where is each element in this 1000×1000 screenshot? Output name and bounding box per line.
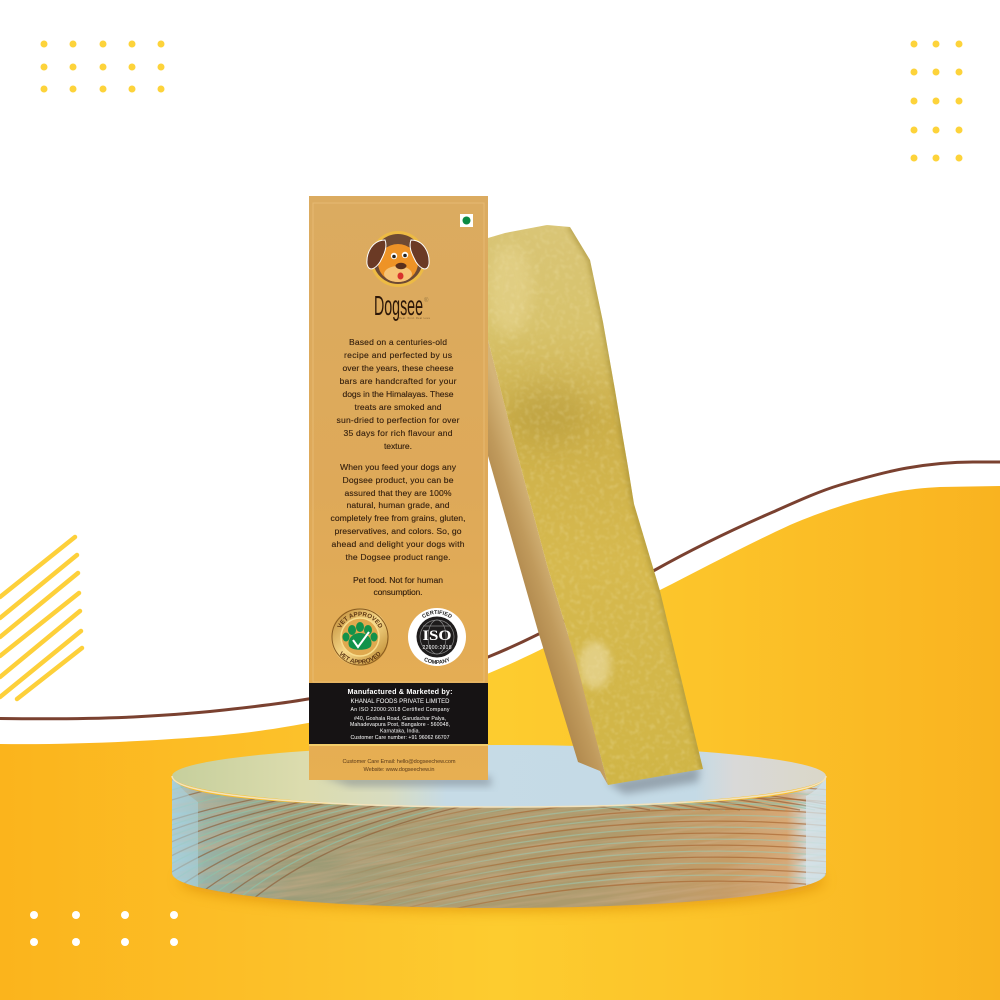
dots: top left bbox=[40, 40, 164, 92]
paragraph 1: over the years, these cheese bbox=[342, 363, 454, 373]
paragraph 2: Dogsee product, you can be bbox=[342, 475, 454, 485]
product box bbox=[309, 196, 488, 780]
platform shadow bbox=[180, 850, 824, 910]
paragraph 1: dogs in the Himalayas. These bbox=[342, 389, 454, 399]
diagonal stripes bbox=[0, 537, 82, 699]
paragraph 1: treats are smoked and bbox=[354, 402, 442, 412]
paragraph 2: ahead and delight your dogs with bbox=[332, 539, 465, 549]
customer care contact: Customer Care Email: hello@dogseechew.com bbox=[342, 759, 456, 765]
pet food note bbox=[353, 575, 443, 597]
black manufacturer band: KHANAL FOODS PRIVATE LIMITED bbox=[350, 699, 450, 705]
customer care contact bbox=[342, 759, 456, 773]
paragraph 2: completely free from grains, gluten, bbox=[330, 513, 466, 523]
paragraph 2: assured that they are 100% bbox=[344, 488, 452, 498]
cheese side face bbox=[488, 340, 608, 785]
paragraph 1: sun-dried to perfection for over bbox=[336, 415, 460, 425]
paragraph 1: 35 days for rich flavour and bbox=[344, 428, 453, 438]
platform rim highlight bbox=[172, 776, 826, 807]
paragraph 1: recipe and perfected by us bbox=[344, 350, 452, 360]
veg mark bbox=[460, 214, 473, 227]
vet approved badge: VET APPROVED bbox=[340, 651, 380, 664]
paragraph 2: natural, human grade, and bbox=[346, 500, 450, 510]
ISO badge: 22000:2018 bbox=[422, 645, 452, 651]
brand name: Dogsee bbox=[374, 290, 423, 321]
pet food note: Pet food. Not for human bbox=[353, 575, 443, 585]
paragraph 1 bbox=[336, 337, 460, 451]
paragraph 2: When you feed your dogs any bbox=[340, 462, 457, 472]
black manufacturer band bbox=[309, 683, 488, 746]
black manufacturer band: Mahadevapura Post, Bangalore - 560048, bbox=[350, 722, 450, 728]
customer care contact: Website: www.dogseechew.in bbox=[364, 767, 434, 773]
inner border bbox=[313, 203, 484, 682]
black manufacturer band: Karnataka, India. bbox=[380, 728, 420, 734]
brand name: Real. Kind. Real Love bbox=[399, 317, 431, 320]
ISO badge: ISO bbox=[422, 628, 452, 644]
vet approved badge bbox=[331, 608, 389, 666]
brown wave line bbox=[0, 462, 1000, 719]
black manufacturer band: #40, Goshala Road, Garudachar Palya, bbox=[354, 716, 446, 722]
yellow wave background bbox=[0, 486, 1000, 1000]
dots: top right bbox=[910, 40, 962, 162]
paragraph 1: bars are handcrafted for your bbox=[340, 376, 457, 386]
paragraph 1: texture. bbox=[384, 441, 412, 451]
black manufacturer band: Customer Care number: +91 96062 66707 bbox=[350, 735, 450, 741]
black manufacturer band: An ISO 22000:2018 Certified Company bbox=[350, 707, 450, 713]
vet approved badge: VET APPROVED bbox=[337, 612, 382, 628]
paragraph 2: preservatives, and colors. So, go bbox=[334, 526, 462, 536]
cheese shadow on platform bbox=[606, 766, 700, 794]
wooden platform bbox=[171, 745, 827, 916]
dog logo bbox=[367, 231, 429, 287]
dots: bottom left bbox=[30, 911, 178, 946]
cheese bar bbox=[480, 220, 710, 790]
paragraph 2 bbox=[330, 462, 466, 562]
platform side bbox=[172, 778, 826, 908]
paragraph 1: Based on a centuries-old bbox=[349, 337, 447, 347]
platform top bbox=[172, 745, 826, 807]
brand name bbox=[374, 290, 431, 321]
ISO badge bbox=[408, 608, 466, 666]
brand name: ® bbox=[424, 297, 429, 304]
cheese texture bbox=[480, 220, 710, 790]
ISO badge: COMPANY bbox=[424, 657, 449, 664]
ISO badge: CERTIFIED bbox=[422, 610, 452, 618]
cheese top face bbox=[488, 225, 703, 785]
pet food note: consumption. bbox=[374, 587, 422, 597]
black manufacturer band: Manufactured & Marketed by: bbox=[348, 687, 452, 696]
box shadow on platform bbox=[320, 776, 492, 786]
paragraph 2: the Dogsee product range. bbox=[346, 552, 450, 562]
